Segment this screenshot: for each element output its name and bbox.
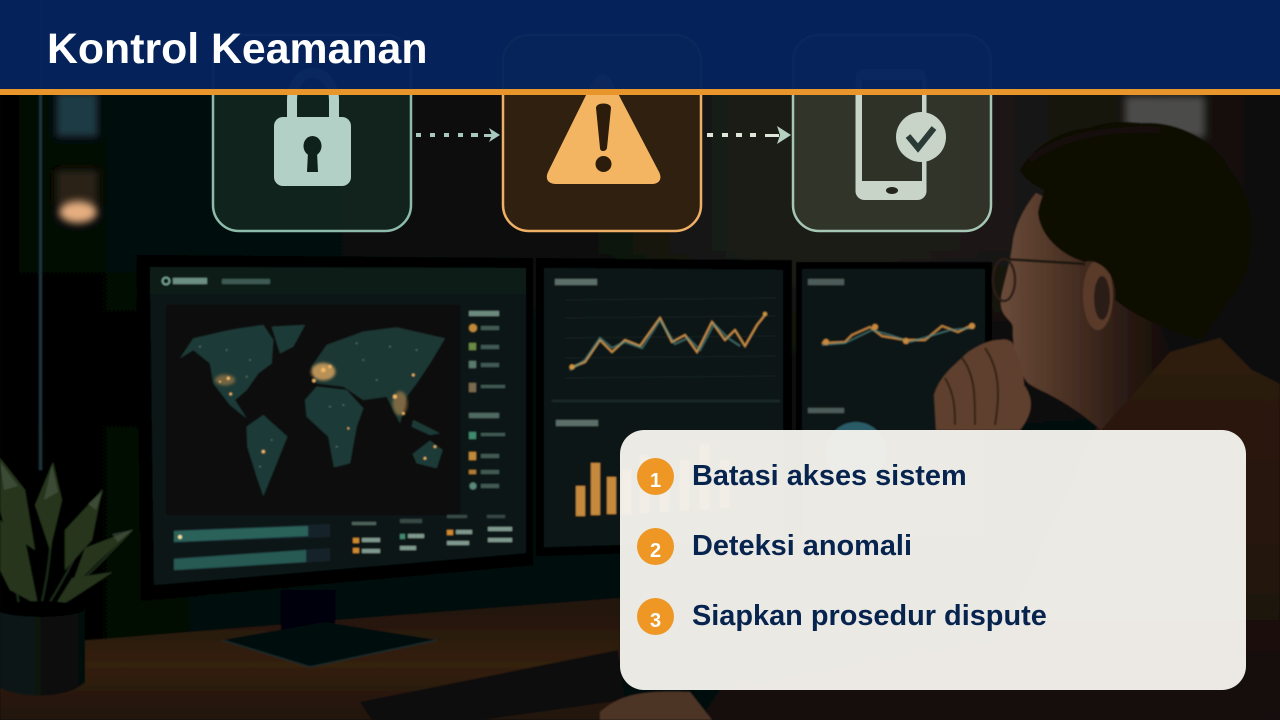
icon: padlock: [274, 73, 351, 186]
shirt: [700, 338, 1280, 720]
resting arm: [600, 692, 712, 720]
item 3: 3: [650, 610, 661, 632]
item 1: Batasi akses sistem: [692, 460, 967, 492]
arrow: warning to phone: [707, 126, 791, 144]
line chart: [570, 312, 767, 370]
bar chart: [576, 445, 729, 516]
person: [600, 122, 1280, 720]
item 3: Siapkan prosedur dispute: [692, 600, 1047, 632]
monitor stand: [222, 590, 437, 667]
phone card: [793, 35, 991, 231]
item 2: 2: [650, 540, 661, 562]
monitor 3: [796, 262, 992, 546]
item 1: 1: [650, 470, 661, 492]
glasses: [992, 258, 1085, 301]
lock card: [213, 35, 411, 231]
header band: [0, 0, 1280, 95]
world map: [165, 303, 462, 517]
item 2: Deteksi anomali: [692, 530, 912, 562]
keyboard: [360, 650, 625, 720]
title: Kontrol Keamanan: [47, 25, 427, 73]
accent line: [0, 89, 1280, 95]
icon: phone with check: [856, 69, 946, 200]
hair: [1020, 122, 1251, 340]
hand: [934, 339, 1031, 430]
ear: [1083, 260, 1113, 330]
monitor 2: [536, 258, 792, 556]
side list: [469, 311, 505, 490]
dashboard mini tiles: [352, 515, 512, 553]
warning card: [503, 35, 701, 231]
arrow: lock to warning: [416, 128, 500, 142]
monitor 1: [137, 255, 533, 600]
desk: [0, 598, 620, 720]
panel: security control list: [620, 430, 1246, 690]
face: [1001, 193, 1170, 430]
icon: warning triangle: [547, 74, 660, 184]
item 2: [637, 528, 912, 565]
plant pot: [0, 601, 85, 696]
plant: [0, 458, 134, 610]
progress bars: [174, 524, 330, 571]
security flow icons: [213, 35, 991, 231]
window blur highlights: [39, 0, 1205, 470]
